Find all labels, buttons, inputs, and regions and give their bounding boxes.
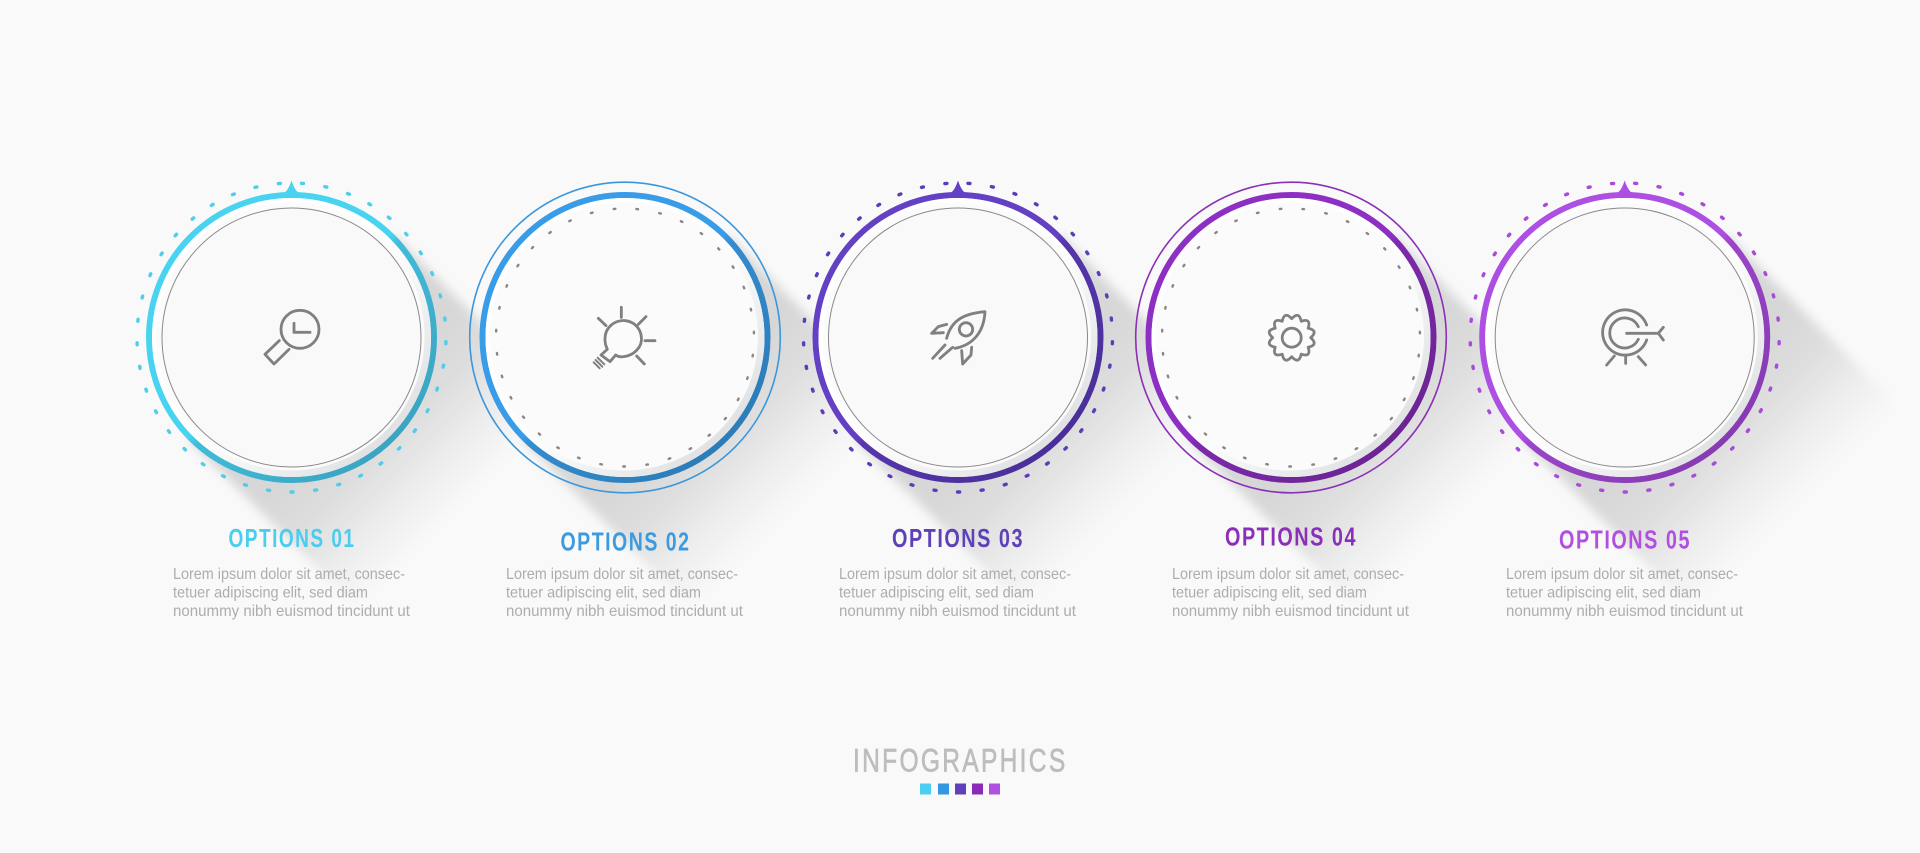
heading: options 05: OPTIONS 05 [1559,524,1691,554]
text block 02 [506,566,744,620]
text block 02: tetuer adipiscing elit, sed diam [506,584,701,602]
dial 04 [1136,182,1446,493]
dial 05 [1461,173,1789,502]
text block 02: Lorem ipsum dolor sit amet, consec- [506,566,738,583]
text block 04: tetuer adipiscing elit, sed diam [1172,584,1367,602]
footer title: INFOGRAPHICS [853,742,1068,778]
dial 02 [470,182,780,493]
text block 05: tetuer adipiscing elit, sed diam [1506,584,1701,602]
long shadow 04 [1188,235,1591,638]
icon: rocket [932,312,985,364]
text block 01: tetuer adipiscing elit, sed diam [173,584,368,602]
icon: gear [1269,315,1314,360]
heading: options 02: OPTIONS 02 [560,526,690,556]
text block 05 [1506,566,1744,620]
footer colour squares [920,784,1000,794]
icon: magnifier with clock [265,310,319,364]
text block 05: nonummy nibh euismod tincidunt ut [1506,603,1744,620]
text block 04 [1172,566,1410,620]
long shadow 02 [522,235,925,638]
dial 01 [127,173,456,502]
panel: options 04 [1136,182,1591,637]
text block 03: tetuer adipiscing elit, sed diam [839,584,1034,602]
dial 03 [794,173,1122,502]
text block 04: Lorem ipsum dolor sit amet, consec- [1172,566,1404,583]
icon: target with arrow [1603,310,1663,365]
text block 03: nonummy nibh euismod tincidunt ut [839,603,1077,620]
long shadow 01 [189,235,592,638]
panel: options 02 [470,182,925,637]
panel: options 05 [1461,173,1920,638]
heading: options 03: OPTIONS 03 [892,523,1024,553]
text block 01 [173,566,411,620]
panel: options 03 [794,173,1258,638]
text block 03 [839,566,1077,620]
text block 02: nonummy nibh euismod tincidunt ut [506,603,744,620]
long shadow 03 [856,235,1258,638]
text block 03: Lorem ipsum dolor sit amet, consec- [839,566,1071,583]
heading: options 04: OPTIONS 04 [1225,522,1357,552]
panel: options 01 [127,173,592,638]
icon: light bulb [594,307,655,368]
heading: options 01: OPTIONS 01 [228,523,356,553]
text block 01: Lorem ipsum dolor sit amet, consec- [173,566,405,583]
long shadow 05 [1522,235,1920,638]
text block 05: Lorem ipsum dolor sit amet, consec- [1506,566,1738,583]
text block 04: nonummy nibh euismod tincidunt ut [1172,603,1410,620]
text block 01: nonummy nibh euismod tincidunt ut [173,603,411,620]
